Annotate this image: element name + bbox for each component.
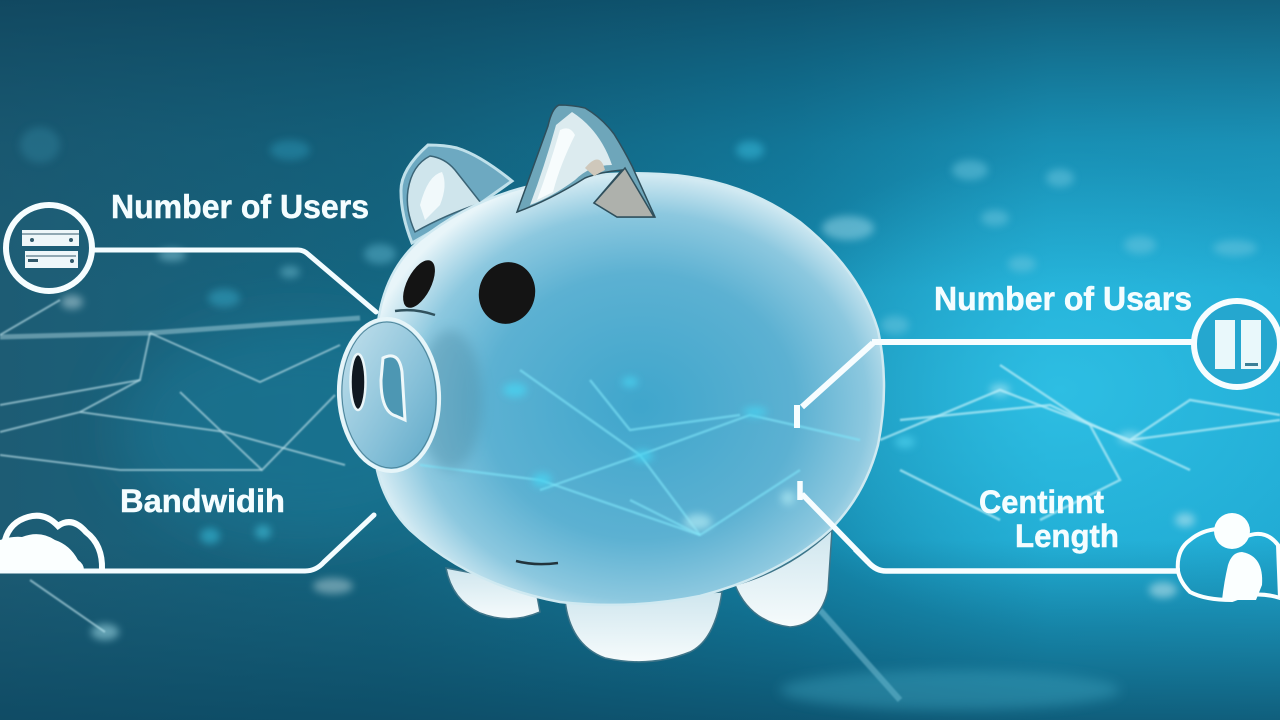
pig far ear [401,145,512,243]
pig mouth [516,561,558,564]
pig feet [446,530,832,662]
connector: bottom left [0,515,374,571]
pig eye far [397,255,441,313]
label: Content Length: Length [1015,518,1119,554]
piggy bank [335,105,884,662]
body shadow near snout [418,330,482,470]
pig snout [335,316,443,474]
label: Number of Users right: Number of Usars [934,280,1192,317]
icon: server rack [6,205,92,291]
icon: cloud with user [1178,513,1280,600]
connector stub: upper right [797,343,873,428]
label: Bandwidth: Bandwidih [120,483,285,519]
icon: cloud [0,516,102,570]
bokeh light spots [20,127,1257,710]
connector: lower right [855,549,1180,571]
network lines left [0,300,360,632]
connector stub: lower right [800,481,868,562]
pig eye near [472,256,542,330]
label: Content Length: Centinnt [979,484,1104,520]
connector: upper right [872,339,1197,345]
snout upper highlight [395,310,435,315]
pig body [377,173,884,605]
pig near ear [517,105,655,217]
icon: server towers [1194,301,1280,387]
network lines right [820,365,1280,700]
label: Number of Users left: Number of Users [111,188,369,225]
connector: top left [92,250,376,312]
body inner glow nodes [503,377,795,530]
body inner network [420,370,860,535]
